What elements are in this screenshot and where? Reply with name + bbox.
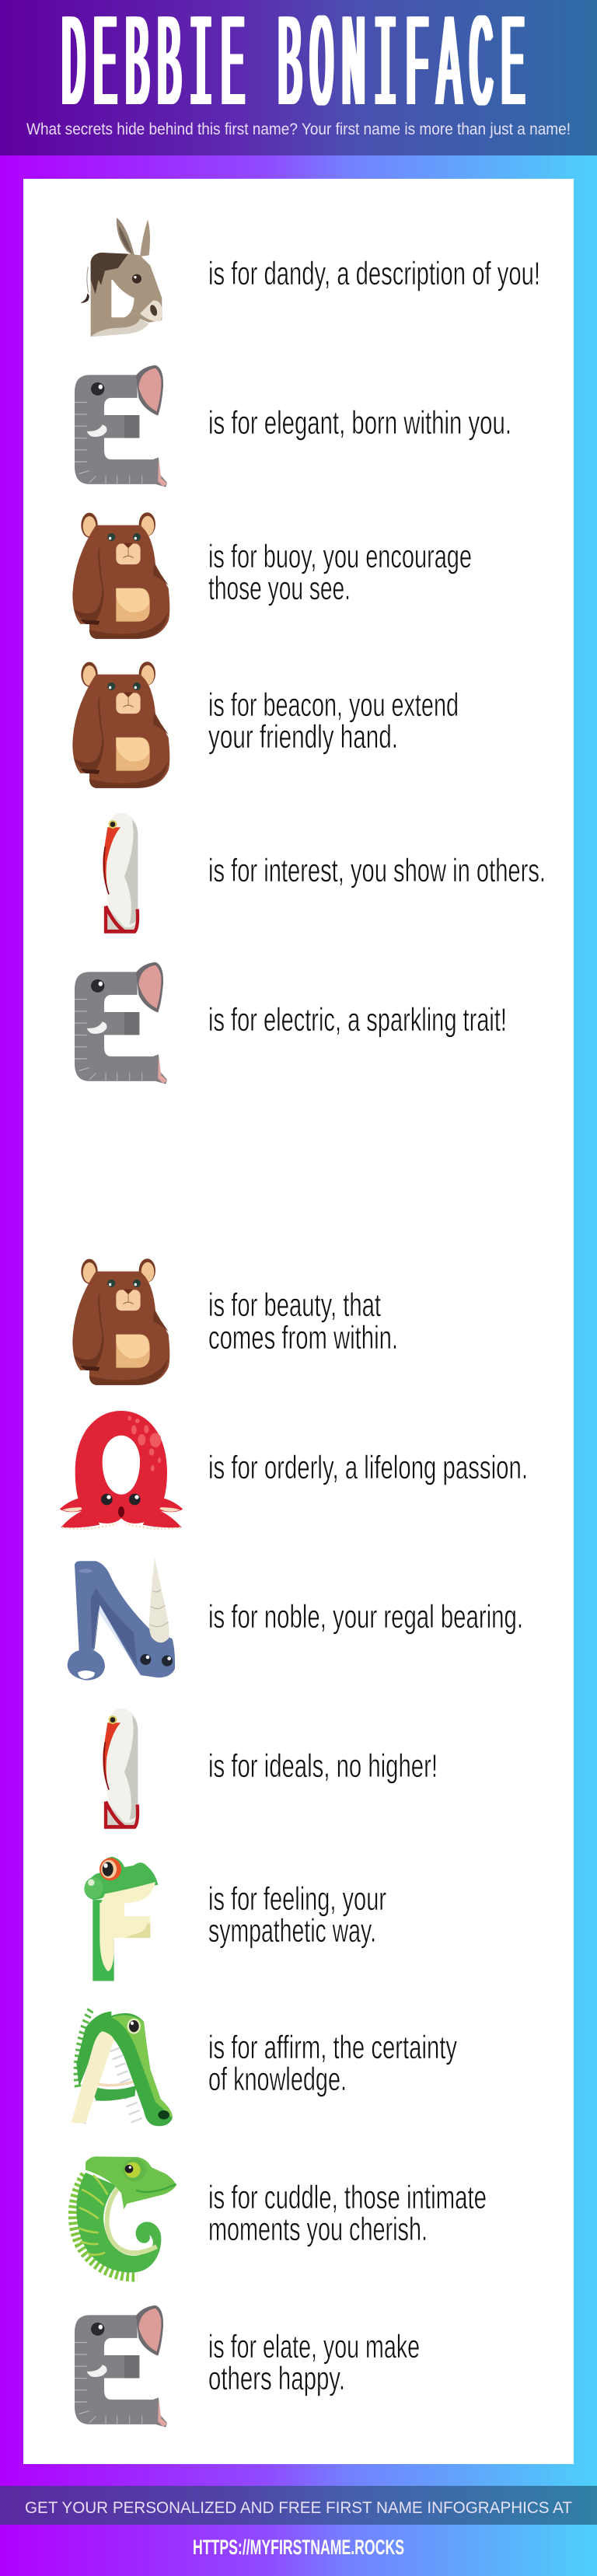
text: elate: is for elate, you make	[208, 2328, 420, 2365]
text: feeling: is for feeling, your	[208, 1880, 386, 1917]
text: beacon	[208, 686, 459, 755]
icon: bear letter B	[72, 512, 169, 639]
row 13: C cuddle	[74, 2156, 487, 2276]
row 8: O orderly	[60, 1411, 528, 1529]
icon: crocodile letter A	[72, 2010, 173, 2126]
row 9: N noble	[68, 1559, 523, 1681]
row 6: E electric	[75, 962, 507, 1084]
footer band	[0, 2486, 597, 2525]
row 7: B beauty	[72, 1258, 398, 1385]
icon: frog letter F	[84, 1857, 158, 1981]
text: elate: others happy.	[208, 2360, 345, 2396]
row 1: D dandy	[80, 218, 540, 337]
footer url: HTTPS://MYFIRSTNAME.ROCKS	[193, 2536, 404, 2559]
icon: elephant letter E	[75, 365, 167, 487]
header band	[0, 0, 597, 155]
row 4: B beacon	[72, 661, 459, 788]
text: beauty	[208, 1286, 398, 1356]
row 12: A affirm	[72, 2010, 457, 2126]
icon: elephant letter E	[75, 962, 167, 1084]
text: beacon: is for beacon, you extend	[208, 686, 459, 723]
footer call to action: GET YOUR PERSONALIZED AND FREE FIRST NAME INFOGRAPHICS AT	[25, 2499, 572, 2517]
text: affirm: is for affirm, the certainty	[208, 2029, 457, 2065]
icon: octopus letter O	[60, 1411, 183, 1529]
icon: chameleon letter C	[74, 2156, 176, 2276]
icon: stork letter I	[103, 1709, 138, 1827]
text: feeling	[208, 1880, 386, 1949]
icon: stork letter I	[103, 813, 138, 931]
text: buoy: is for buoy, you encourage	[208, 538, 472, 574]
row 3: B buoy	[72, 512, 472, 639]
text: buoy: those you see.	[208, 570, 351, 606]
icon: elephant letter E	[75, 2305, 167, 2428]
row 2: E elegant	[75, 365, 511, 487]
text: elate	[208, 2328, 420, 2396]
text: affirm: of knowledge.	[208, 2061, 347, 2097]
row 11: F feeling	[84, 1857, 386, 1981]
icon: bear letter B	[72, 1258, 169, 1385]
text: cuddle	[208, 2179, 487, 2247]
text: feeling: sympathetic way.	[208, 1912, 376, 1949]
row 10: I ideals	[103, 1709, 438, 1827]
text: ideals: is for ideals, no higher!	[208, 1747, 438, 1784]
text: cuddle: is for cuddle, those intimate	[208, 2179, 487, 2215]
row 5: I interest	[103, 813, 546, 931]
row 14: E elate	[75, 2305, 420, 2428]
text: beauty: comes from within.	[208, 1319, 398, 1356]
icon: bear letter B	[72, 661, 169, 788]
text: beauty: is for beauty, that	[208, 1286, 381, 1323]
icon: donkey letter D	[80, 218, 162, 337]
text: buoy	[208, 538, 472, 606]
text: beacon: your friendly hand.	[208, 718, 398, 755]
text: cuddle: moments you cherish.	[208, 2211, 428, 2247]
text: affirm	[208, 2029, 457, 2097]
icon: narwhal letter N	[68, 1559, 175, 1681]
